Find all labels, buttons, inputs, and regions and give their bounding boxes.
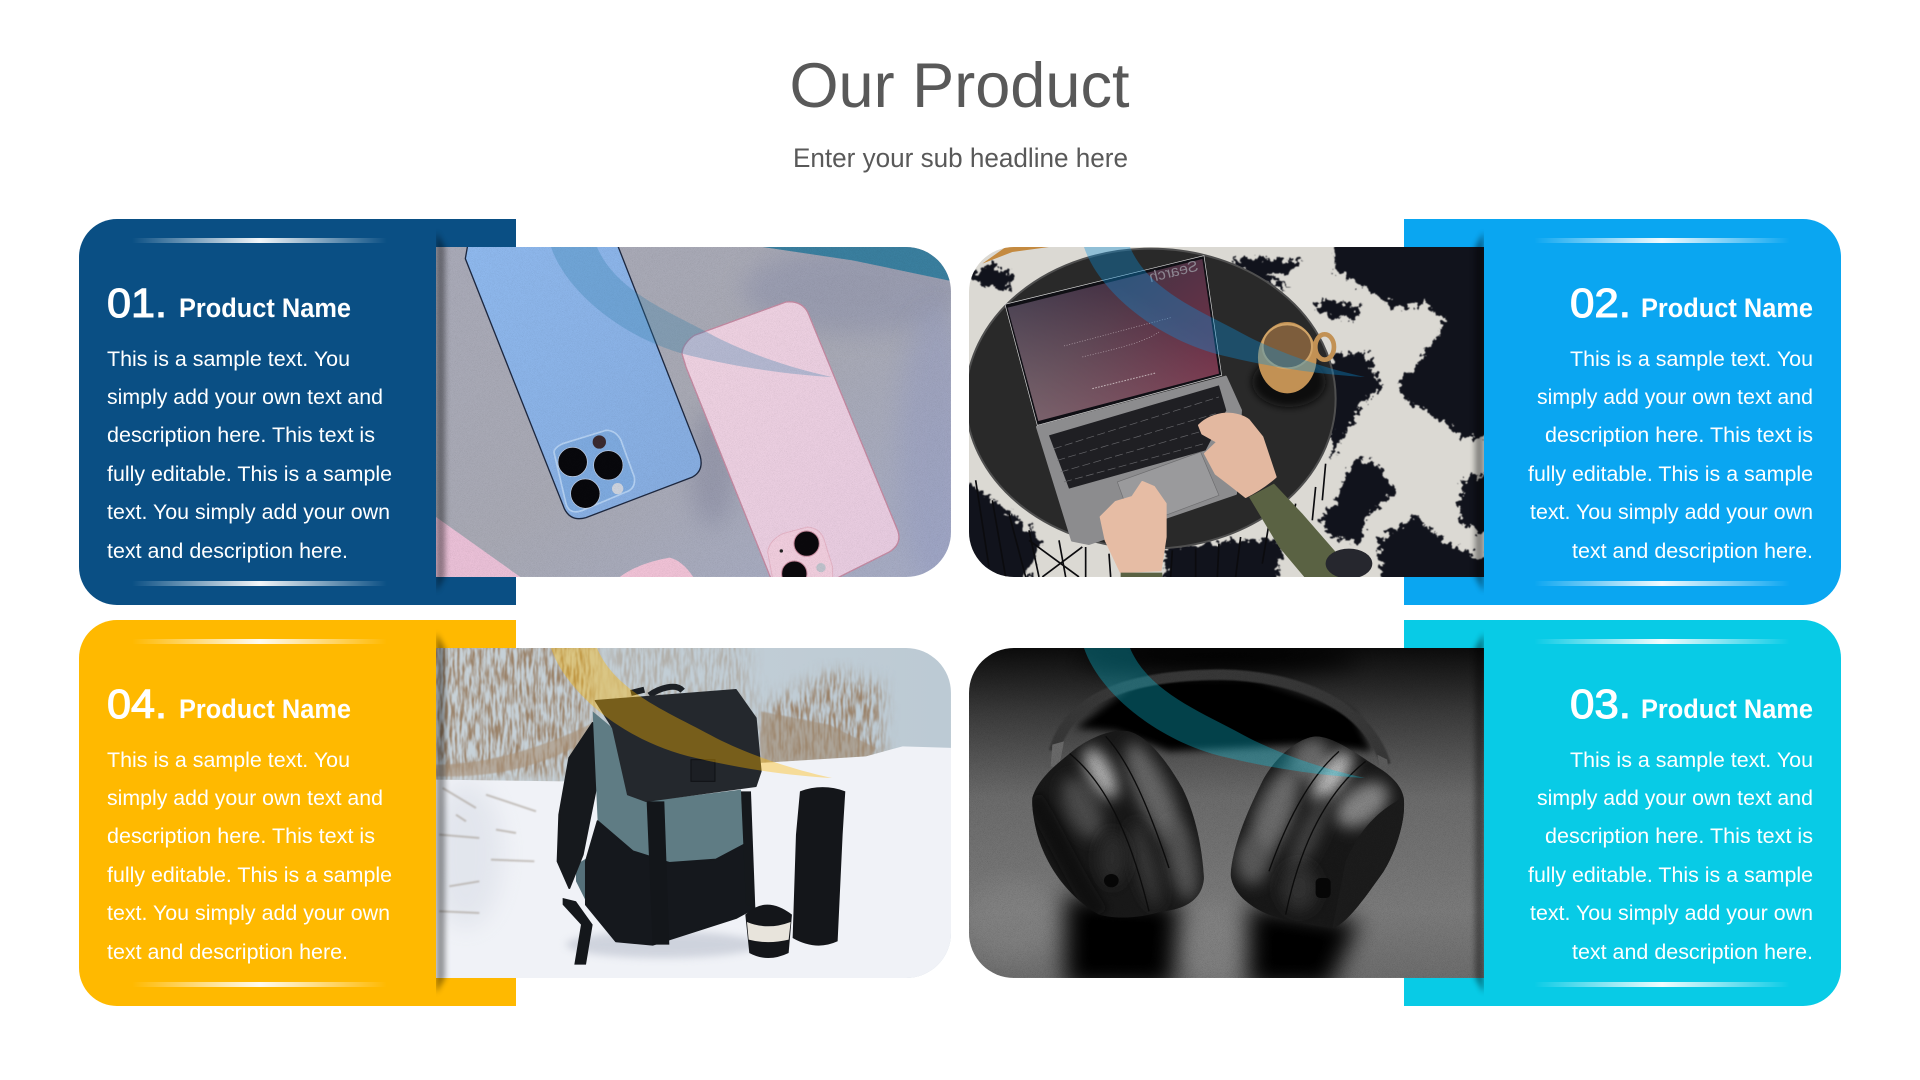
description (1528, 348, 1813, 563)
number: 03. (1570, 681, 1631, 727)
product name: Product Name (179, 293, 351, 323)
description: text. You simply add your own (1530, 902, 1813, 925)
description: This is a sample text. You (1570, 749, 1813, 772)
panel: product 02 (956, 219, 1841, 605)
top highlight bar (132, 639, 387, 644)
photo: laptop on table: Search (1147, 258, 1200, 286)
description: This is a sample text. You (1570, 348, 1813, 371)
description: description here. This text is (1545, 424, 1813, 447)
product name: Product Name (1641, 293, 1813, 323)
panel: product 04 (79, 620, 956, 1006)
panel: product 01 (79, 219, 973, 605)
description: fully editable. This is a sample (107, 463, 392, 486)
description (107, 348, 392, 563)
coffee cup (745, 905, 792, 958)
description: fully editable. This is a sample (1528, 463, 1813, 486)
description: text and description here. (107, 540, 348, 563)
description: text. You simply add your own (107, 501, 390, 524)
card background (79, 620, 516, 1006)
description: text and description here. (1572, 540, 1813, 563)
description: description here. This text is (1545, 825, 1813, 848)
sleeve (1249, 484, 1338, 577)
panel: product 03 (966, 620, 1841, 1006)
subtitle: Enter your sub headline here (793, 143, 1128, 173)
edge shadow (436, 232, 445, 592)
bottom highlight bar (1534, 982, 1790, 987)
number: 02. (1570, 280, 1631, 326)
description: simply add your own text and (1537, 787, 1813, 810)
photo: headphones (966, 645, 1484, 988)
product name: Product Name (1641, 694, 1813, 724)
backpack (558, 687, 761, 965)
description (107, 749, 392, 964)
photo: backpack in snow (436, 648, 951, 978)
description: fully editable. This is a sample (107, 864, 392, 887)
left ear cup (1032, 731, 1204, 918)
description: description here. This text is (107, 825, 375, 848)
photo: laptop on table (969, 247, 1484, 577)
top highlight bar (1534, 639, 1790, 644)
bottom highlight bar (1534, 581, 1790, 586)
title: Our Product (790, 51, 1130, 121)
description: simply add your own text and (1537, 386, 1813, 409)
card background (1404, 219, 1841, 605)
edge shadow (1475, 232, 1484, 592)
description: text. You simply add your own (1530, 501, 1813, 524)
top highlight bar (1534, 238, 1790, 243)
description: description here. This text is (107, 424, 375, 447)
edge shadow (436, 633, 445, 993)
top highlight bar (132, 238, 387, 243)
photo: two phones (436, 245, 973, 587)
description: This is a sample text. You (107, 749, 350, 772)
description: This is a sample text. You (107, 348, 350, 371)
description: simply add your own text and (107, 787, 383, 810)
bottom highlight bar (132, 581, 387, 586)
number: 04. (107, 681, 167, 727)
card background (79, 219, 516, 605)
description (1528, 749, 1813, 964)
thermos (793, 787, 845, 946)
description: text and description here. (107, 941, 348, 964)
product name: Product Name (179, 694, 351, 724)
bottom highlight bar (132, 982, 387, 987)
edge shadow (1475, 633, 1484, 993)
description: fully editable. This is a sample (1528, 864, 1813, 887)
card background (1404, 620, 1841, 1006)
description: text. You simply add your own (107, 902, 390, 925)
description: text and description here. (1572, 941, 1813, 964)
description: simply add your own text and (107, 386, 383, 409)
right ear cup (1230, 736, 1404, 926)
number: 01. (107, 280, 167, 326)
